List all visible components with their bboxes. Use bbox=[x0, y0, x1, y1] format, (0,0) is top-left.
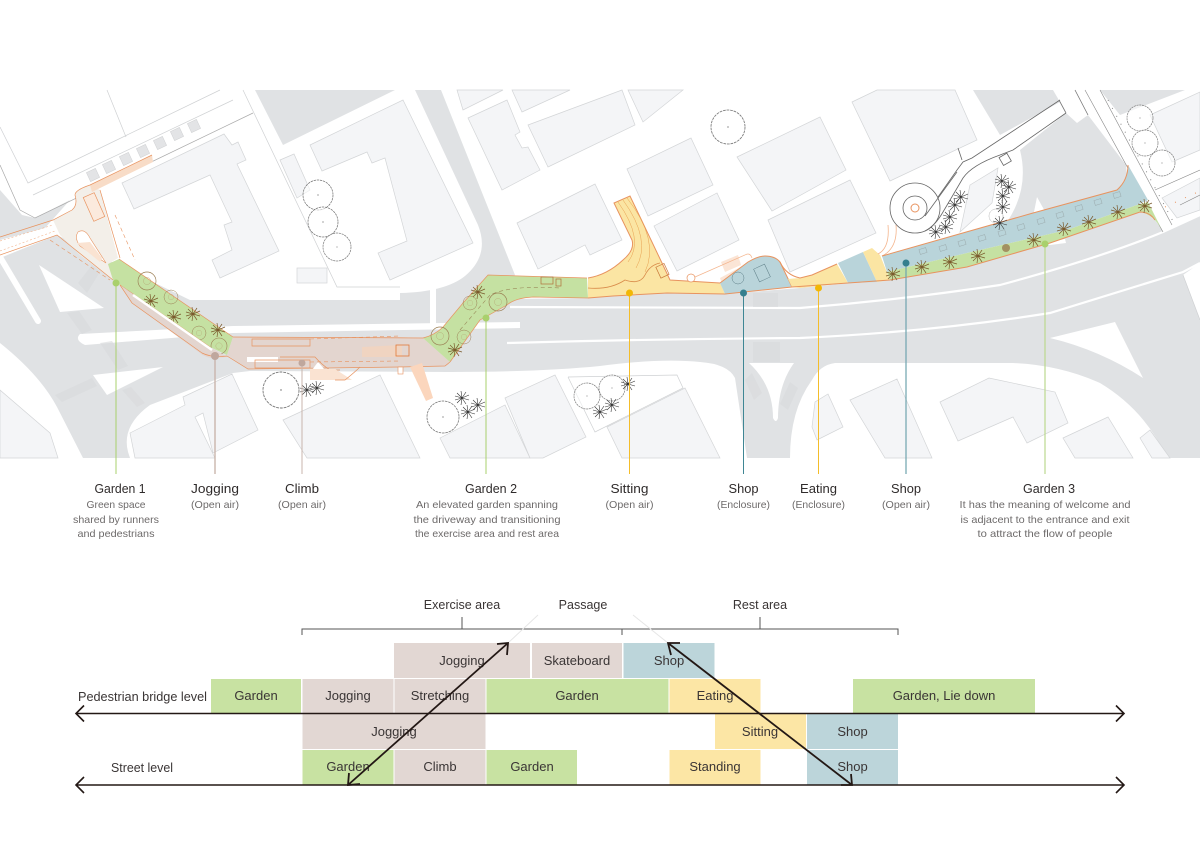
zone: garden 1 bbox=[108, 259, 233, 355]
callout: Jogging: Jogging bbox=[191, 481, 239, 496]
row: between levels: Jogging bbox=[371, 724, 417, 739]
callout: Garden 2: Garden 2 bbox=[465, 481, 517, 496]
row: pedestrian bridge level: Eating bbox=[697, 688, 733, 703]
callout: Eating bbox=[792, 284, 845, 511]
callout: Garden 1: shared by runners bbox=[73, 514, 159, 526]
callout: Garden 3: to attract the flow of people bbox=[978, 528, 1113, 540]
row: street level: Garden bbox=[326, 759, 370, 774]
zone: shop open air and entry bbox=[838, 165, 1148, 283]
zone: garden 3 bbox=[848, 199, 1163, 283]
row: street level: Standing bbox=[689, 759, 741, 774]
arrow: street level axis bbox=[76, 777, 1124, 793]
callout: Eating: Eating bbox=[800, 481, 837, 496]
callout: Garden 1: Garden 1 bbox=[94, 481, 146, 496]
callout: Garden 1: Green space bbox=[86, 499, 146, 511]
surrounding buildings bbox=[0, 90, 1200, 458]
row: pedestrian bridge level: Garden bbox=[555, 688, 599, 703]
callout: Garden 2: the exercise area and rest area bbox=[415, 528, 559, 540]
callout: Sitting bbox=[606, 290, 654, 511]
callout: Shop enclosure: (Enclosure) bbox=[717, 499, 770, 511]
site plan map bbox=[0, 90, 1200, 458]
callout: Garden 1 bbox=[73, 280, 159, 540]
callout: Climb: (Open air) bbox=[278, 499, 326, 511]
row: pedestrian bridge level: Jogging bbox=[325, 688, 371, 703]
row: pedestrian bridge level: Pedestrian bridge level bbox=[78, 689, 207, 704]
callout: Shop enclosure bbox=[717, 290, 770, 511]
row: pedestrian bridge level: Garden, Lie down bbox=[893, 688, 995, 703]
row: street level: Shop bbox=[837, 759, 868, 774]
row: street level: Street level bbox=[111, 760, 173, 775]
callout: Shop open air: (Open air) bbox=[882, 499, 930, 511]
trees and palms bbox=[263, 105, 1175, 433]
area brackets and headings: Passage bbox=[559, 598, 607, 612]
row: between levels: Sitting bbox=[742, 724, 778, 739]
row: street level bbox=[111, 750, 898, 784]
row: upper bridge programmes: Shop bbox=[654, 653, 684, 668]
row: upper bridge programmes bbox=[394, 643, 714, 678]
callout: Shop open air bbox=[882, 260, 930, 511]
area brackets and headings bbox=[302, 598, 898, 643]
callout: Climb bbox=[278, 360, 326, 511]
callout: Sitting: (Open air) bbox=[606, 499, 654, 511]
spiral ramp and walkway bbox=[890, 90, 1200, 233]
row: street level: Garden bbox=[510, 759, 554, 774]
row: pedestrian bridge level bbox=[78, 679, 1035, 713]
row: between levels bbox=[302, 714, 898, 749]
arrow: ramp up passage east bbox=[668, 643, 852, 785]
row: pedestrian bridge level: Garden bbox=[234, 688, 278, 703]
callout: Sitting: Sitting bbox=[610, 481, 648, 496]
callout: Garden 3 bbox=[960, 240, 1131, 540]
callout: Garden 3: It has the meaning of welcome and bbox=[960, 499, 1131, 511]
callout: Shop enclosure: Shop bbox=[728, 481, 758, 496]
zone: shop enclosure bbox=[720, 256, 792, 294]
callout: Shop open air: Shop bbox=[891, 481, 921, 496]
callout: Garden 2: the driveway and transitioning bbox=[414, 514, 561, 526]
row: upper bridge programmes: Skateboard bbox=[544, 653, 610, 668]
row: upper bridge programmes: Jogging bbox=[439, 653, 485, 668]
callout: Garden 3: is adjacent to the entrance and exit bbox=[960, 514, 1130, 526]
zone: jogging and climb bbox=[120, 285, 450, 401]
row: pedestrian bridge level: Stretching bbox=[411, 688, 469, 703]
callout: Garden 1: and pedestrians bbox=[78, 528, 154, 540]
entrance plaza at west end bbox=[0, 155, 153, 280]
arrow: pedestrian bridge level axis bbox=[76, 706, 1124, 722]
callout: Garden 3: Garden 3 bbox=[1023, 481, 1075, 496]
callout: Garden 2: An elevated garden spanning bbox=[416, 499, 558, 511]
callout: Climb: Climb bbox=[285, 481, 319, 496]
section diagram bbox=[76, 598, 1124, 793]
road network bbox=[0, 90, 1200, 458]
zone: sitting bbox=[588, 196, 752, 298]
area brackets and headings: Rest area bbox=[733, 598, 787, 612]
arrow: ramp up passage west bbox=[348, 643, 508, 785]
row: street level: Climb bbox=[423, 759, 457, 774]
callout: Garden 2 bbox=[414, 314, 561, 540]
callout: Eating: (Enclosure) bbox=[792, 499, 845, 511]
zone: garden 2 bbox=[423, 275, 588, 362]
area brackets and headings: Exercise area bbox=[424, 598, 500, 612]
row: between levels: Shop bbox=[837, 724, 868, 739]
callout: Jogging: (Open air) bbox=[191, 499, 239, 511]
zone: eating bbox=[780, 262, 848, 288]
callout: Jogging bbox=[191, 352, 239, 511]
